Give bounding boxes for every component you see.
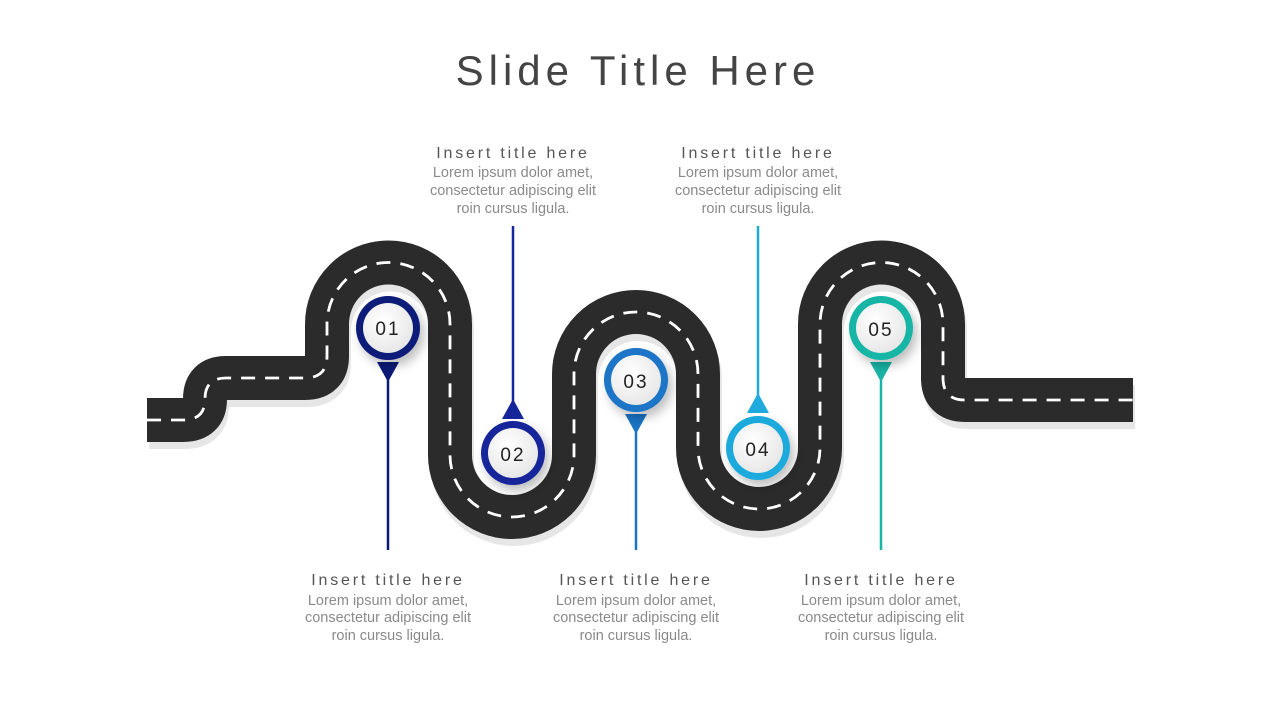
- marker 05: 05: [868, 320, 894, 341]
- text block 01: [305, 572, 471, 644]
- text block 04: roin cursus ligula.: [702, 201, 814, 217]
- marker 02: [481, 226, 545, 485]
- text block 05: [798, 572, 964, 644]
- marker 01: [356, 296, 420, 550]
- text block 04: Lorem ipsum dolor amet,: [678, 165, 838, 181]
- marker 05: [849, 296, 913, 550]
- text block 03: consectetur adipiscing elit: [553, 610, 719, 626]
- title: Slide Title Here: [456, 47, 820, 94]
- text block 05: Insert title here: [804, 572, 958, 589]
- text block 05: roin cursus ligula.: [825, 628, 937, 644]
- text block 02: consectetur adipiscing elit: [430, 183, 596, 199]
- text block 02: Lorem ipsum dolor amet,: [433, 165, 593, 181]
- text block 01: consectetur adipiscing elit: [305, 610, 471, 626]
- text block 04: consectetur adipiscing elit: [675, 183, 841, 199]
- text block 05: consectetur adipiscing elit: [798, 610, 964, 626]
- text block 03: roin cursus ligula.: [580, 628, 692, 644]
- text block 04: Insert title here: [681, 145, 835, 162]
- marker 03: [604, 348, 668, 550]
- text block 02: roin cursus ligula.: [457, 201, 569, 217]
- text block 03: [553, 572, 719, 644]
- marker 04: 04: [745, 440, 771, 461]
- marker 03: 03: [623, 372, 649, 393]
- text block 05: Lorem ipsum dolor amet,: [801, 593, 961, 609]
- text block 01: Lorem ipsum dolor amet,: [308, 593, 468, 609]
- marker 02: 02: [500, 445, 526, 466]
- text block 03: Insert title here: [559, 572, 713, 589]
- text block 02: [430, 145, 596, 217]
- marker 01: 01: [375, 319, 401, 340]
- road: [147, 262, 1135, 524]
- text block 01: roin cursus ligula.: [332, 628, 444, 644]
- marker 04: [726, 226, 790, 480]
- text block 02: Insert title here: [436, 145, 590, 162]
- text block 01: Insert title here: [311, 572, 465, 589]
- text block 03: Lorem ipsum dolor amet,: [556, 593, 716, 609]
- text block 04: [675, 145, 841, 217]
